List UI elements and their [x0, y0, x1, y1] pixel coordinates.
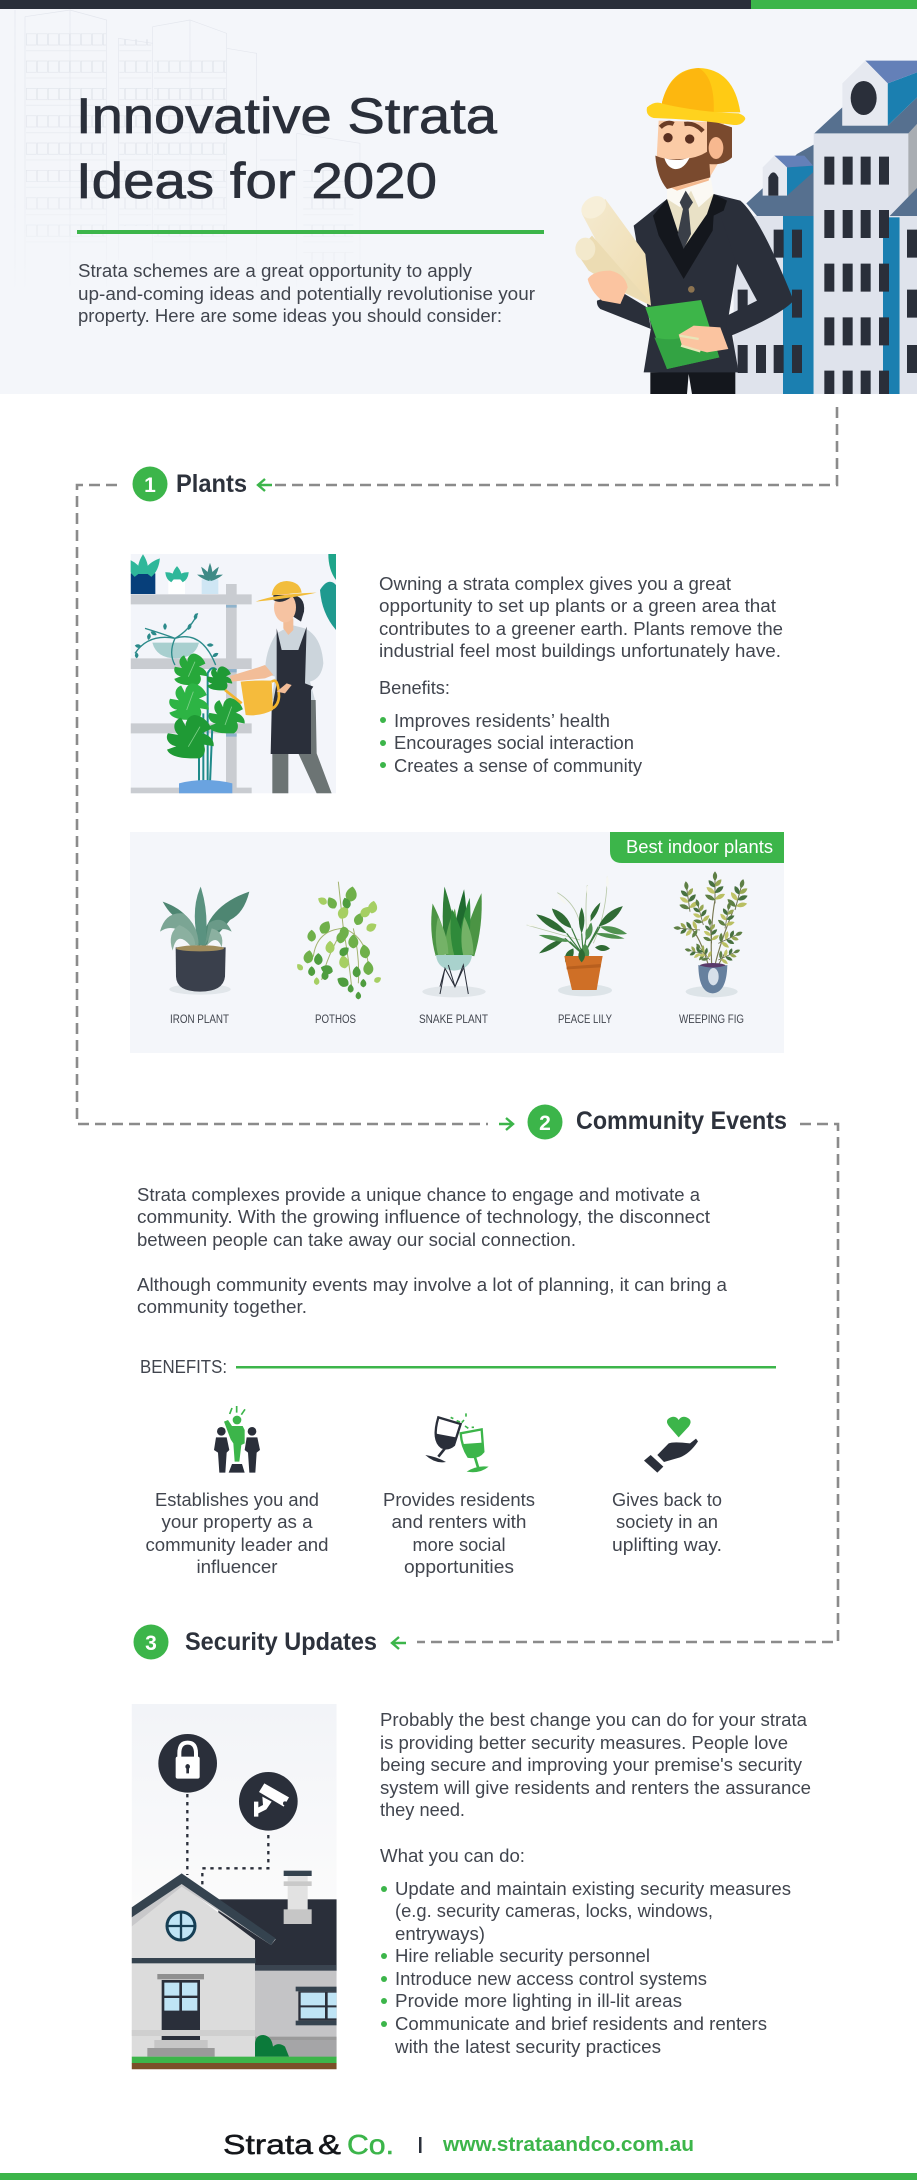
intro text: Strata schemes are a great opportunity to apply	[78, 261, 472, 281]
security action list: Update and maintain existing security measures	[395, 1879, 791, 1899]
heading: community events: 2	[539, 1112, 551, 1135]
heading: community events	[499, 1104, 787, 1140]
plant: peace lily	[526, 875, 628, 996]
security action list: Hire reliable security personnel	[395, 1946, 650, 1966]
benefit text: leader: influencer	[196, 1557, 278, 1577]
benefit text: leader: Establishes you and	[155, 1490, 319, 1510]
heading: community events: Community Events	[576, 1107, 787, 1135]
plant labels	[170, 1014, 744, 1026]
plants benefits list	[380, 711, 642, 776]
plant labels: WEEPING FIG	[679, 1014, 744, 1026]
title: Ideas for 2020	[76, 153, 437, 209]
plant labels: POTHOS	[315, 1014, 356, 1026]
centre tower	[814, 61, 917, 394]
benefit text: society: society in an	[616, 1512, 718, 1532]
heading: plants: Plants	[176, 470, 247, 498]
community events body text	[137, 1185, 728, 1317]
icon: toasting glasses	[425, 1413, 489, 1472]
benefit text: society	[612, 1490, 722, 1555]
security body text: is providing better security measures. People love	[380, 1733, 788, 1753]
plant labels: IRON PLANT	[170, 1014, 229, 1026]
plants benefits list: Creates a sense of community	[394, 756, 642, 776]
illustration: gardener	[122, 554, 336, 793]
security body text: they need.	[380, 1800, 465, 1820]
benefit text: leader: your property as a	[162, 1512, 314, 1532]
connector: plants to community events	[77, 485, 488, 1124]
background building line art	[14, 10, 360, 236]
plant: snake plant	[422, 886, 488, 997]
community events body text: Although community events may involve a lot of planning, it can bring a	[137, 1275, 728, 1295]
illustration: house with security	[132, 1704, 337, 2069]
footer divider	[419, 2137, 422, 2153]
security action list: Introduce new access control systems	[395, 1969, 707, 1989]
benefit text: social: opportunities	[404, 1557, 514, 1577]
intro text: property. Here are some ideas you should consider:	[78, 306, 502, 326]
footer logo: &	[318, 2129, 341, 2160]
benefit text: social	[383, 1490, 535, 1577]
intro text	[78, 261, 535, 326]
icon: leader	[214, 1406, 260, 1473]
security action list: with the latest security practices	[394, 2037, 661, 2057]
benefit text: society: uplifting way.	[612, 1535, 722, 1555]
bottom bar	[0, 2173, 917, 2180]
plant: pothos	[295, 882, 382, 999]
security action list: Communicate and brief residents and renters	[395, 2014, 767, 2034]
top bar	[0, 0, 917, 9]
tag: best indoor plants: Best indoor plants	[626, 837, 773, 857]
panel: best indoor plants	[130, 832, 784, 1053]
benefit text: social: and renters with	[392, 1512, 526, 1532]
benefit text: leader: community leader and	[146, 1535, 328, 1555]
heading: plants: 1	[144, 474, 156, 497]
panel: hero	[0, 9, 917, 394]
plants body text: contributes to a greener earth. Plants remove the	[379, 619, 783, 639]
heading: plants	[132, 466, 272, 502]
plants benefits list: Improves residents’ health	[394, 711, 610, 731]
security action list: (e.g. security cameras, locks, windows,	[395, 1901, 713, 1921]
security body text: What you can do:	[380, 1846, 525, 1866]
security action list: Provide more lighting in ill-lit areas	[395, 1991, 682, 2011]
benefit text: social: more social	[412, 1535, 506, 1555]
tag: best indoor plants	[610, 832, 784, 863]
plants body text: opportunity to set up plants or a green area that	[379, 596, 776, 616]
heading: security updates: Security Updates	[185, 1628, 377, 1656]
footer logo: Strata	[223, 2129, 314, 2160]
connector: hero to plants	[275, 407, 837, 485]
monstera leaves	[167, 653, 245, 758]
intro text: up-and-coming ideas and potentially revolutionise your	[78, 284, 535, 304]
security body text	[380, 1710, 811, 1866]
icon: camera	[239, 1772, 298, 1831]
title: Innovative Strata	[76, 88, 497, 144]
plant: iron plant	[160, 887, 249, 995]
benefits label and rule: BENEFITS:	[140, 1357, 227, 1377]
builder figure	[575, 68, 794, 394]
community events body text: community together.	[137, 1297, 307, 1317]
plants body text: Owning a strata complex gives you a great	[379, 574, 731, 594]
security body text: being secure and improving your premise's security	[380, 1755, 802, 1775]
connector: community events to security updates	[417, 1124, 838, 1642]
plants benefits list: Encourages social interaction	[394, 733, 634, 753]
security action list	[381, 1879, 791, 2057]
security body text: system will give residents and renters the assurance	[380, 1778, 811, 1798]
plants body text: Benefits:	[379, 678, 450, 698]
footer logo	[223, 2129, 394, 2160]
community events body text: Strata complexes provide a unique chance to engage and motivate a	[137, 1185, 701, 1205]
left building	[734, 145, 814, 394]
footer website: www.strataandco.com.au	[442, 2134, 694, 2156]
security action list: entryways)	[395, 1924, 485, 1944]
benefit text: society: Gives back to	[612, 1490, 722, 1510]
icon: heart in hand	[644, 1417, 698, 1473]
title rule	[77, 230, 544, 234]
community events body text: community. With the growing influence of technology, the disconnect	[137, 1207, 710, 1227]
footer logo: Co.	[347, 2129, 394, 2160]
plant: weeping fig	[673, 871, 754, 997]
illustration: builder and buildings	[575, 61, 917, 394]
plant labels: SNAKE PLANT	[419, 1014, 488, 1026]
community events body text: between people can take away our social connection.	[137, 1230, 576, 1250]
plants body text: industrial feel most buildings unfortunately have.	[379, 641, 781, 661]
security body text: Probably the best change you can do for your strata	[380, 1710, 808, 1730]
heading: security updates	[134, 1624, 406, 1660]
title	[76, 88, 497, 209]
icon: lock	[158, 1734, 217, 1793]
heading: security updates: 3	[145, 1632, 157, 1655]
benefit text: social: Provides residents	[383, 1490, 535, 1510]
plants body text	[379, 574, 783, 698]
plant labels: PEACE LILY	[558, 1014, 612, 1026]
dotted connectors	[187, 1794, 268, 1888]
benefit text: leader	[146, 1490, 328, 1577]
